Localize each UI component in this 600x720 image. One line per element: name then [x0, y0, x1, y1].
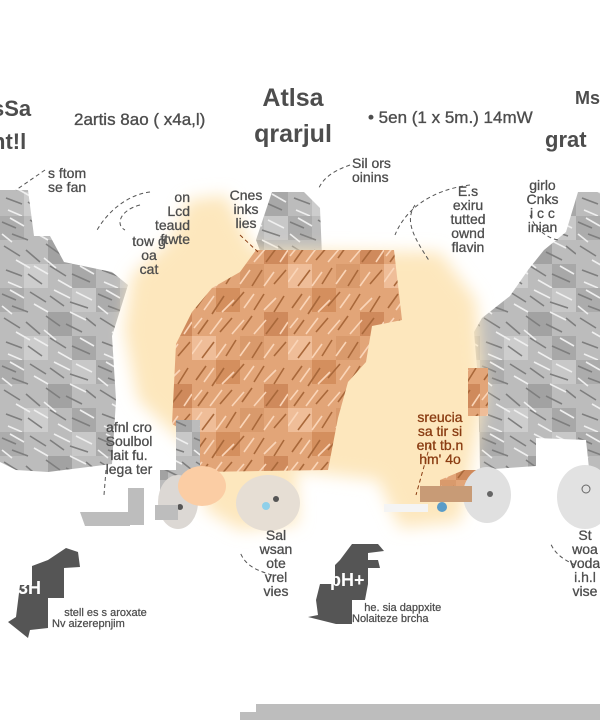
callout: right center: exiru: [453, 197, 483, 213]
caption left: stell es s aroxate: [64, 607, 147, 619]
callout: chest: Cnes: [230, 187, 262, 203]
heading: center title: qrarjul: [254, 120, 332, 148]
callout arrows: [16, 165, 575, 575]
callout: upper right: girlo: [529, 177, 556, 193]
badge label right: pH+: [330, 570, 365, 590]
callout: bottom right: voda: [570, 555, 600, 571]
callout: right center: tutted: [450, 211, 486, 227]
callout: bottom right: i.h.l: [574, 569, 596, 585]
callout: right center: ownd: [451, 225, 485, 241]
caption left: [52, 607, 147, 630]
callout: bottom center: wsan: [260, 541, 292, 557]
callout: left inner: on: [174, 189, 190, 205]
callout: chest: inks: [234, 201, 258, 217]
callout: top: Sil ors: [352, 155, 391, 171]
caption right: [352, 602, 441, 625]
feet right: [384, 465, 600, 529]
callout: lower left: lega ter: [106, 461, 152, 477]
callout: bottom center: vies: [264, 583, 288, 599]
callout: left inner: ftwte: [160, 231, 190, 247]
callout: lower center: hm' 4o: [419, 451, 461, 467]
heading: right title: [545, 88, 600, 152]
callout: left inner: teaud: [155, 217, 190, 233]
badge blob left: [8, 548, 80, 638]
callout: lower center: ent tb.n: [417, 437, 463, 453]
callout: upper right: i c c: [530, 205, 555, 221]
callout: top: oinins: [352, 169, 389, 185]
cream glow: [124, 195, 484, 530]
caption left: Nv aizerepnjim: [52, 618, 125, 630]
heading: center title: [254, 84, 332, 148]
fur: gray silhouette left: [0, 190, 128, 472]
callout: left inner lower: oa: [141, 247, 157, 263]
text: right spec line: • 5en (1 x 5m.) 14mW: [368, 108, 533, 127]
callout: bottom center: Sal: [266, 527, 286, 543]
callout: upper right: inian: [528, 219, 557, 235]
callout: bottom right: [570, 527, 600, 599]
callout: right center: [450, 183, 486, 255]
heading: left title: [0, 96, 32, 154]
badge label left: 3H: [18, 578, 41, 598]
callout: left inner lower: cat: [140, 261, 158, 277]
callout: lower left: afnl cro: [106, 419, 152, 435]
callout: right center: E.s: [458, 183, 478, 199]
callout: lower left: Soulbol: [106, 433, 152, 449]
callout: chest: [230, 187, 262, 231]
callout: left inner: Lcd: [167, 203, 190, 219]
callout: bottom right: woa: [572, 541, 598, 557]
callout: upper right: [527, 177, 558, 235]
callout: bottom center: [260, 527, 292, 599]
callout: bottom right: vise: [573, 583, 597, 599]
feet left: [158, 466, 300, 531]
callout: bottom center: ote: [266, 555, 286, 571]
callout: lower center: sreucia: [417, 409, 463, 425]
fur: orange body: [172, 250, 402, 472]
caption right: he. sia dappxite: [364, 602, 441, 614]
callout: lower center: [417, 409, 463, 467]
fur: gray silhouette top: [256, 192, 322, 256]
callout: left inner lower: [132, 233, 166, 277]
fur: gray silhouette right: [474, 192, 600, 478]
text: left spec line: 2artis 8ao ( x4a,l): [74, 110, 205, 129]
callout: upper left: se fan: [48, 179, 86, 195]
callout: left inner lower: tow g: [132, 233, 166, 249]
callout: lower left: [106, 419, 152, 478]
callout: bottom right: St: [578, 527, 592, 543]
callout: top: [352, 155, 391, 185]
callout: upper left: [48, 165, 86, 195]
heading: center title: Atlsa: [262, 84, 324, 112]
fur: orange right tuft: [440, 368, 488, 500]
callout: bottom center: vrel: [265, 569, 287, 585]
fur: gray under body: [160, 420, 200, 500]
toy scrap near left foot: [80, 488, 178, 526]
badge blob right: [308, 544, 384, 624]
callout: upper right: Cnks: [527, 191, 558, 207]
callout: right center: flavin: [452, 239, 484, 255]
heading: right title: grat: [545, 127, 587, 152]
callout: chest: lies: [235, 215, 256, 231]
callout: lower left: lait fu.: [110, 447, 148, 463]
caption right: Nolaiteze brcha: [352, 613, 428, 625]
bottom gray band: [240, 704, 600, 720]
callout: left inner: [155, 189, 190, 247]
callout: lower center: sa tir si: [418, 423, 462, 439]
callout: upper left: s ftom: [48, 165, 86, 181]
